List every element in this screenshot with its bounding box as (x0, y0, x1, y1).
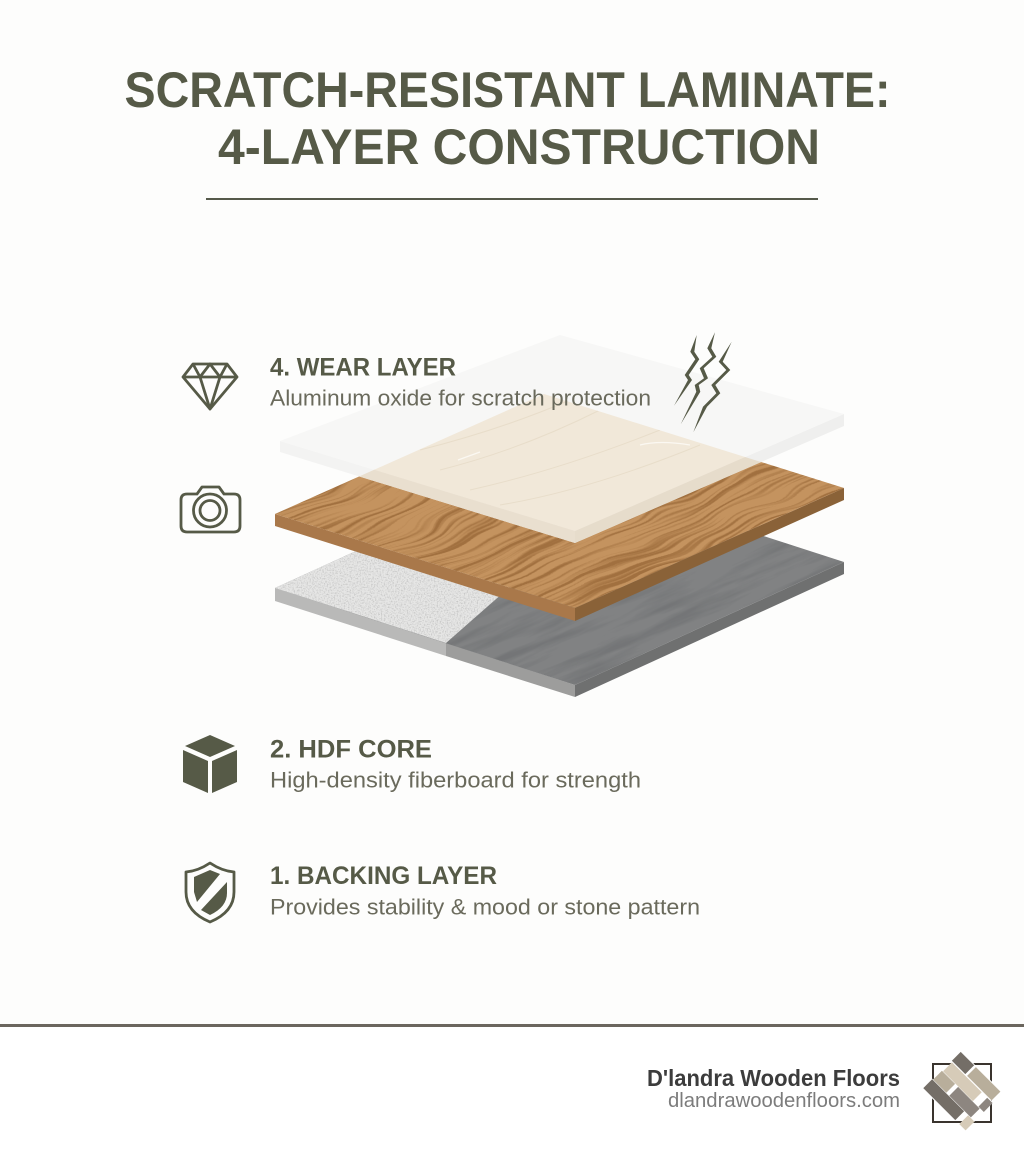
footer (0, 1024, 1024, 1154)
logo (928, 1056, 996, 1126)
layer: transparent wear layer (280, 394, 844, 543)
brand text (647, 1065, 900, 1112)
text: backing layer: Provides stability & mood or stone pattern (270, 894, 700, 920)
brand text: D'landra Wooden Floors (647, 1065, 900, 1091)
title (124, 62, 890, 175)
text: HDF core: High-density fiberboard for strength (270, 768, 641, 792)
icon: diamond (183, 364, 237, 409)
text: wear layer: Aluminum oxide for scratch protection (270, 386, 651, 410)
title: SCRATCH-RESISTANT LAMINATE: (124, 62, 890, 118)
text: HDF core (270, 736, 641, 792)
text: wear layer (270, 354, 651, 410)
text: wear layer: 4. WEAR LAYER (270, 354, 456, 382)
brand text: dlandrawoodenfloors.com (668, 1090, 900, 1112)
icon: scratch marks (674, 332, 732, 432)
text: backing layer: 1. BACKING LAYER (270, 862, 497, 890)
icon: cube (183, 735, 237, 793)
icon: camera (181, 487, 240, 532)
layer: stone backing (275, 531, 844, 697)
layer: oak decor with HDF edge (275, 458, 844, 621)
text: backing layer (270, 862, 700, 920)
title: 4-LAYER CONSTRUCTION (218, 119, 820, 175)
text: HDF core: 2. HDF CORE (270, 736, 432, 764)
layer stack illustration (275, 332, 844, 697)
icon: shield (186, 863, 234, 922)
